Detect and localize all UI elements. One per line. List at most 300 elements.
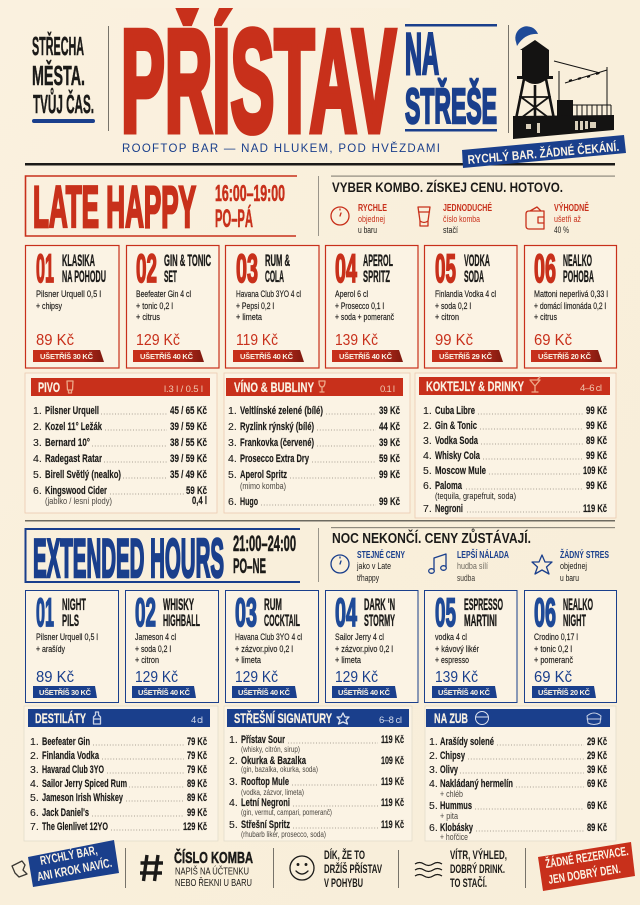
card: 02 Whisky Highball: 02 bbox=[135, 591, 156, 635]
text: wind and view: VÍTR, VÝHLED, bbox=[450, 847, 507, 862]
heading: extended hours: EXTENDED HOURS bbox=[33, 527, 224, 589]
text: same prices bbox=[356, 548, 405, 583]
card: 01 Night Pils bbox=[26, 590, 118, 702]
text: combo number bbox=[174, 848, 253, 889]
list: snacks: + pita bbox=[440, 811, 458, 821]
header: signature: 6–8 cl bbox=[379, 715, 402, 726]
ingredients bbox=[135, 632, 176, 666]
ingredients: Pilsner Urquell 0,5 l bbox=[36, 289, 101, 300]
list: snacks: Klobásky bbox=[440, 822, 474, 834]
list: beer: 4. bbox=[33, 453, 42, 465]
text: no stress: objednej bbox=[560, 561, 587, 571]
ingredients bbox=[235, 632, 302, 666]
combo title: WHISKY bbox=[163, 596, 194, 614]
list: spirits bbox=[30, 736, 207, 833]
text: value: ušetři až bbox=[554, 214, 581, 224]
tagline: ROOFTOP BAR — NAD HLUKEM, POD HVĚZDAMI bbox=[122, 142, 440, 155]
list: cocktails: Moscow Mule bbox=[435, 465, 486, 477]
text: no stress bbox=[560, 548, 609, 583]
ingredients: + citrus bbox=[136, 312, 160, 323]
list: snacks: 69 Kč bbox=[587, 778, 607, 790]
ingredients bbox=[36, 289, 101, 312]
list: spirits: The Glenlivet 12YO bbox=[42, 821, 108, 833]
list: beer: 59 Kč bbox=[186, 485, 207, 497]
price: 99 Kč bbox=[435, 332, 473, 349]
header: spirits: 4 cl bbox=[191, 715, 203, 726]
header: cocktails: KOKTEJLY & DRINKY bbox=[426, 378, 524, 394]
ingredients: + soda 0,2 l bbox=[435, 301, 471, 312]
card: 06 Nealko Pohoba: POHOBA bbox=[563, 268, 594, 286]
savings: UŠETŘÍŠ 40 KČ bbox=[338, 688, 391, 697]
combo title: MARTINI bbox=[464, 612, 497, 630]
list: wine: 44 Kč bbox=[379, 421, 400, 433]
card: 02 Whisky Highball bbox=[126, 590, 218, 702]
list: spirits: 7. bbox=[30, 821, 39, 833]
list: spirits: 79 Kč bbox=[187, 750, 207, 762]
combo title bbox=[363, 252, 393, 286]
savings: UŠETŘÍŠ 40 KČ bbox=[140, 352, 194, 361]
panel: night intro: NOC NEKONČÍ. CENY ZŮSTÁVAJÍ. bbox=[332, 528, 531, 547]
savings: UŠETŘÍŠ 20 KČ bbox=[538, 352, 592, 361]
ingredients: Aperol 6 cl bbox=[335, 289, 368, 300]
list: snacks: Olivy bbox=[440, 764, 459, 776]
list: cocktails: Cuba Libre bbox=[435, 405, 475, 417]
list: beer: Pilsner Urquell bbox=[45, 405, 99, 417]
text: thanks: DRŽÍŠ PŘÍSTAV bbox=[324, 861, 382, 876]
list: beer: 5. bbox=[33, 469, 42, 481]
list: snacks: + chléb bbox=[440, 789, 463, 799]
text: better mood: sudba bbox=[457, 573, 475, 583]
ingredients bbox=[335, 632, 393, 666]
list: wine: 2. bbox=[228, 421, 237, 433]
savings: UŠETŘÍŠ 40 KČ bbox=[438, 688, 491, 697]
card: 03 Rum Cocktail bbox=[226, 590, 318, 702]
ingredients: Pilsner Urquell 0,5 l bbox=[36, 632, 98, 643]
combo title bbox=[164, 252, 211, 286]
text: value: VÝHODNĚ bbox=[554, 201, 589, 214]
text: wind and view bbox=[450, 847, 507, 890]
card: 01 Night Pils: NIGHT bbox=[62, 596, 86, 614]
list: snacks bbox=[429, 736, 607, 842]
text: value: 40 % bbox=[554, 225, 569, 235]
ingredients: vodka 4 cl bbox=[435, 632, 467, 643]
ingredients: + zázvor.pivo 0,2 l bbox=[335, 644, 393, 655]
header: spirits: DESTILÁTY bbox=[35, 710, 86, 726]
list: signature: (gin, vermut, campari, pomeranč) bbox=[241, 808, 332, 817]
list: cocktails: 5. bbox=[423, 465, 432, 477]
ingredients: + domácí limonáda 0,2 l bbox=[534, 301, 606, 312]
list: beer: 3. bbox=[33, 437, 42, 449]
list: wine bbox=[228, 405, 400, 508]
header: beer: l.3 l / 0.5 l bbox=[164, 384, 203, 395]
ingredients: + tonic 0,2 l bbox=[534, 644, 572, 655]
list: cocktails bbox=[423, 405, 607, 515]
text: STŘEŠE bbox=[405, 79, 497, 134]
list: snacks: Hummus bbox=[440, 800, 472, 812]
card: 03 Rum Cocktail: 03 bbox=[235, 591, 257, 635]
list: snacks: 39 Kč bbox=[587, 764, 607, 776]
text: better mood: hudba sílí bbox=[457, 561, 488, 571]
card: 02 Gin & Tonic: GIN & TONIC bbox=[164, 252, 211, 270]
ingredients: Jameson 4 cl bbox=[135, 632, 176, 643]
list: beer: Kingswood Cider bbox=[45, 485, 107, 497]
list: snacks: 3. bbox=[429, 764, 438, 776]
icon: star bbox=[532, 555, 552, 574]
list: cocktails: 4. bbox=[423, 450, 432, 462]
list: wine: 3. bbox=[228, 437, 237, 449]
list: spirits: 5. bbox=[30, 792, 39, 804]
list: wine: 39 Kč bbox=[379, 405, 400, 417]
list: snacks: Nakládaný hermelín bbox=[440, 778, 513, 790]
card: 04 Aperol Spritz: APEROL bbox=[363, 252, 393, 270]
list: snacks: 1. bbox=[429, 736, 438, 748]
ingredients: Havana Club 3YO 4 cl bbox=[236, 289, 301, 300]
text: same prices: jako v Late bbox=[356, 561, 391, 571]
card: 06 Nealko Night: NEALKO bbox=[563, 596, 593, 614]
savings: UŠETŘÍŠ 40 KČ bbox=[339, 352, 393, 361]
text: quick: u baru bbox=[358, 225, 377, 235]
card: 03 Rum & Cola: RUM & bbox=[265, 252, 290, 270]
slogan bbox=[32, 31, 95, 123]
slogan: MĚSTA. bbox=[32, 60, 85, 91]
header: cocktails bbox=[419, 377, 610, 395]
price: 139 Kč bbox=[435, 669, 478, 686]
ingredients bbox=[435, 289, 496, 323]
list: cocktails: 99 Kč bbox=[586, 405, 607, 417]
ingredients bbox=[534, 289, 608, 323]
icon: crumpled note bbox=[12, 861, 27, 877]
list: cocktails: 6. bbox=[423, 480, 432, 492]
text: better mood bbox=[457, 548, 509, 583]
list: cocktails: 7. bbox=[423, 503, 432, 515]
text: simple bbox=[443, 201, 492, 235]
list: cocktails: 119 Kč bbox=[583, 503, 607, 515]
list: wine: Aperol Spritz bbox=[240, 469, 287, 481]
price: 129 Kč bbox=[335, 669, 378, 686]
ingredients bbox=[236, 289, 301, 323]
list: beer: 38 / 55 Kč bbox=[170, 437, 207, 449]
list: wine: (mimo komba) bbox=[240, 481, 286, 491]
list: signature: 119 Kč bbox=[381, 776, 404, 788]
ingredients: + kávový likér bbox=[435, 644, 479, 655]
price: 69 Kč bbox=[534, 669, 572, 686]
list: spirits: Jack Daniel's bbox=[42, 807, 89, 819]
price: 89 Kč bbox=[36, 332, 74, 349]
price: 129 Kč bbox=[235, 669, 278, 686]
title: na střeše bbox=[405, 22, 497, 134]
icon: hash bbox=[140, 855, 163, 881]
ingredients: + Pepsi 0,2 l bbox=[236, 301, 274, 312]
list: wine: Hugo bbox=[240, 496, 258, 508]
list: spirits: 79 Kč bbox=[187, 736, 207, 748]
card: 06 Nealko Night: 06 bbox=[534, 591, 556, 635]
ingredients: + tonic 0,2 l bbox=[136, 301, 173, 312]
ingredients: + citrus bbox=[534, 312, 557, 323]
list: snacks: 6. bbox=[429, 822, 438, 834]
list: wine: Ryzlink rýnský (bílé) bbox=[240, 421, 314, 433]
combo title: NIGHT bbox=[563, 612, 586, 630]
text: simple: číslo komba bbox=[443, 214, 480, 224]
heading: extended hours bbox=[26, 527, 300, 589]
title: na střeše: NA bbox=[405, 22, 439, 87]
text: thanks: DÍK, ŽE TO bbox=[324, 847, 365, 862]
icon: smiley bbox=[290, 856, 314, 880]
list: beer: Birell Světlý (nealko) bbox=[45, 469, 121, 481]
number: 04 bbox=[335, 591, 357, 635]
list: cocktails: Negroni bbox=[435, 503, 463, 515]
panel: night intro bbox=[331, 527, 615, 583]
list: beer: 35 / 49 Kč bbox=[170, 469, 207, 481]
price: 129 Kč bbox=[136, 332, 180, 349]
icon: waves bbox=[415, 862, 442, 878]
list: spirits: Jameson Irish Whiskey bbox=[42, 792, 124, 804]
header: signature: STŘEŠNÍ SIGNATURY bbox=[234, 709, 332, 726]
list: snacks: 5. bbox=[429, 800, 438, 812]
savings: UŠETŘÍŠ 40 KČ bbox=[240, 352, 294, 361]
header: wine bbox=[226, 378, 403, 396]
text: combo number: ČÍSLO KOMBA bbox=[174, 848, 253, 867]
card: 02 Gin & Tonic: 02 bbox=[136, 247, 157, 291]
list: wine: 59 Kč bbox=[379, 453, 400, 465]
text: quick: objednej bbox=[358, 214, 385, 224]
text: no stress: u baru bbox=[560, 573, 579, 583]
list: beer: (jablko / lesní plody) bbox=[45, 496, 112, 506]
slogan: STŘECHA bbox=[32, 31, 84, 61]
badge: fast bar, no extra step bbox=[28, 840, 119, 887]
ingredients: + espresso bbox=[435, 655, 469, 666]
panel: beer bbox=[25, 373, 217, 513]
list: cocktails: 2. bbox=[423, 420, 432, 432]
price: 139 Kč bbox=[335, 332, 378, 349]
list: wine: Veltlínské zelené (bílé) bbox=[240, 405, 323, 417]
ingredients bbox=[335, 289, 394, 323]
ingredients: + limeta bbox=[236, 312, 263, 323]
list: signature: (vodka, zázvor, limeta) bbox=[241, 788, 304, 797]
list: wine: 39 Kč bbox=[379, 437, 400, 449]
header: spirits bbox=[28, 709, 210, 727]
ingredients: + pomeranč bbox=[534, 655, 573, 666]
list: cocktails: 1. bbox=[423, 405, 432, 417]
list: signature: 119 Kč bbox=[381, 819, 404, 831]
ingredients: Sailor Jerry 4 cl bbox=[335, 632, 384, 643]
list: wine: 99 Kč bbox=[379, 496, 400, 508]
list: signature: 119 Kč bbox=[381, 797, 404, 809]
badge: no reservations bbox=[538, 842, 635, 891]
list: wine: Frankovka (červené) bbox=[240, 437, 314, 449]
text: same prices: třhappy bbox=[357, 573, 379, 583]
list: beer: 39 / 59 Kč bbox=[170, 453, 207, 465]
price: 89 Kč bbox=[36, 669, 74, 686]
combo title bbox=[364, 596, 395, 630]
panel: snacks bbox=[425, 706, 616, 842]
list: cocktails: (tequila, grapefruit, soda) bbox=[435, 491, 516, 501]
text: no stress: ŽÁDNÝ STRES bbox=[560, 548, 609, 561]
price: 119 Kč bbox=[236, 332, 278, 349]
ingredients bbox=[435, 632, 479, 666]
savings: UŠETŘÍŠ 40 KČ bbox=[238, 688, 291, 697]
combo title bbox=[563, 596, 593, 630]
ingredients: Havana Club 3YO 4 cl bbox=[235, 632, 302, 643]
header: beer: PIVO bbox=[38, 379, 60, 395]
list: snacks: + hořčice bbox=[440, 832, 468, 842]
list: beer: 1. bbox=[33, 405, 42, 417]
savings: UŠETŘÍŠ 30 KČ bbox=[40, 352, 94, 361]
heading: late happy: PO–PÁ bbox=[215, 204, 253, 233]
list: spirits: 79 Kč bbox=[187, 764, 207, 776]
list: beer: 6. bbox=[33, 485, 42, 497]
illustration: rooftop water tower bbox=[513, 26, 614, 139]
list: signature: 5. bbox=[229, 819, 238, 831]
list: signature: Okurka & Bazalka bbox=[241, 755, 307, 767]
list: spirits: 129 Kč bbox=[183, 821, 207, 833]
list: cocktails: 99 Kč bbox=[586, 480, 607, 492]
list: wine: Prosecco Extra Dry bbox=[240, 453, 310, 465]
list: cocktails: 109 Kč bbox=[583, 465, 607, 477]
icon: wallet bbox=[526, 207, 544, 229]
text: better mood: LEPŠÍ NÁLADA bbox=[457, 548, 509, 561]
list: signature: (gin, bazalka, okurka, soda) bbox=[241, 765, 318, 774]
heading: extended hours: PO–NE bbox=[233, 555, 266, 578]
text: thanks: V POHYBU bbox=[324, 876, 363, 890]
combo title bbox=[62, 252, 106, 286]
card: 02 Whisky Highball: HIGHBALL bbox=[163, 612, 200, 630]
combo title: SPRITZ bbox=[363, 268, 390, 286]
ingredients: Beefeater Gin 4 cl bbox=[136, 289, 191, 300]
list: signature: 4. bbox=[229, 797, 238, 809]
combo title bbox=[464, 596, 503, 630]
list: wine: 6. bbox=[228, 496, 237, 508]
number: 04 bbox=[335, 247, 357, 291]
card: 06 Nealko Pohoba: NEALKO bbox=[563, 252, 592, 270]
text: same prices: STEJNÉ CENY bbox=[357, 548, 405, 561]
header: wine: VÍNO & BUBLINY bbox=[234, 379, 314, 395]
card: 02 Gin & Tonic bbox=[126, 246, 219, 368]
panel: cocktails bbox=[415, 373, 616, 518]
card: 06 Nealko Night bbox=[524, 590, 616, 702]
header: beer bbox=[31, 378, 210, 396]
heading: late happy: LATE HAPPY bbox=[33, 175, 196, 240]
icon: glass bbox=[418, 207, 430, 226]
combo title: SODA bbox=[464, 268, 484, 286]
card: 01 Night Pils: 01 bbox=[36, 591, 54, 635]
savings: UŠETŘÍŠ 30 KČ bbox=[39, 688, 92, 697]
card: 01 Klasika bbox=[26, 246, 119, 368]
ingredients: Mattoni neperlivá 0,33 l bbox=[534, 289, 608, 300]
card: 03 Rum & Cola: 03 bbox=[236, 247, 258, 291]
ingredients: + limeta bbox=[335, 655, 362, 666]
list: signature: 119 Kč bbox=[381, 734, 404, 746]
combo title bbox=[563, 252, 594, 286]
card: 06 Nealko Pohoba bbox=[524, 246, 616, 368]
ingredients: + soda + pomeranč bbox=[335, 312, 394, 323]
combo title: KLASIKA bbox=[62, 252, 95, 270]
list: spirits: 1. bbox=[30, 736, 39, 748]
text: value bbox=[554, 201, 589, 235]
list: spirits: Finlandia Vodka bbox=[42, 750, 100, 762]
list: beer: 45 / 65 Kč bbox=[170, 405, 207, 417]
list: spirits: 89 Kč bbox=[187, 792, 207, 804]
badge: fast bar, no extra step: RYCHLÝ BAR, bbox=[39, 842, 99, 868]
card: 06 Nealko Pohoba: 06 bbox=[534, 247, 556, 291]
ingredients: + citron bbox=[135, 655, 159, 666]
heading: late happy: 16:00–19:00 bbox=[215, 180, 285, 206]
card: 05 Vodka Soda: 05 bbox=[435, 247, 456, 291]
list: snacks: 89 Kč bbox=[587, 822, 607, 834]
list: beer: 0,4 l bbox=[192, 495, 207, 507]
combo title: COLA bbox=[265, 268, 284, 286]
text: simple: JEDNODUCHÉ bbox=[443, 201, 492, 214]
card: 05 Espresso Martini: 05 bbox=[435, 591, 456, 635]
header: cocktails: 4–6 cl bbox=[580, 383, 602, 394]
text: thanks bbox=[324, 847, 382, 890]
card: 01 Klasika: 01 bbox=[36, 247, 54, 291]
list: cocktails: Paloma bbox=[435, 480, 463, 492]
list: cocktails: Gin & Tonic bbox=[435, 420, 477, 432]
list: beer: Radegast Ratar bbox=[45, 453, 103, 465]
text: quick bbox=[358, 203, 387, 235]
list: signature: Rooftop Mule bbox=[241, 776, 289, 788]
list: spirits: Sailor Jerry Spiced Rum bbox=[42, 778, 127, 790]
header: snacks bbox=[426, 709, 610, 727]
card: 05 Espresso Martini bbox=[424, 590, 517, 702]
panel: wine bbox=[224, 373, 410, 513]
list: signature: Střešní Spritz bbox=[241, 819, 290, 831]
combo title bbox=[163, 596, 200, 630]
list: snacks: 2. bbox=[429, 750, 438, 762]
list: beer: Bernard 10° bbox=[45, 437, 90, 449]
ingredients: + citron bbox=[435, 312, 459, 323]
price: 69 Kč bbox=[534, 332, 572, 349]
card: 04 Dark 'n Stormy: STORMY bbox=[364, 612, 395, 630]
text: combo number: NAPIŠ NA ÚČTENKU bbox=[175, 864, 249, 878]
list: snacks: Chipsy bbox=[440, 750, 466, 762]
ingredients bbox=[136, 289, 191, 323]
list: signature: 109 Kč bbox=[381, 755, 404, 767]
list: signature: (rhubarb likér, prosecco, soda) bbox=[241, 830, 326, 839]
list: spirits: 89 Kč bbox=[187, 778, 207, 790]
card: 05 Vodka Soda: VODKA bbox=[464, 252, 490, 270]
text: wind and view: DOBRÝ DRINK. bbox=[450, 861, 505, 876]
text: quick: RYCHLE bbox=[358, 203, 387, 214]
text: wind and view: TO STAČÍ. bbox=[450, 875, 487, 890]
list: signature: 3. bbox=[229, 776, 238, 788]
ingredients: + limeta bbox=[235, 655, 262, 666]
savings: UŠETŘÍŠ 40 KČ bbox=[138, 688, 191, 697]
card: 04 Aperol Spritz bbox=[326, 246, 418, 368]
list: spirits: 2. bbox=[30, 750, 39, 762]
icon: clock bbox=[331, 207, 349, 225]
combo title: RUM bbox=[264, 596, 282, 614]
card: 03 Rum & Cola bbox=[226, 246, 319, 368]
ingredients bbox=[36, 632, 98, 655]
list: spirits: Beefeater Gin bbox=[42, 736, 90, 748]
list: snacks: 4. bbox=[429, 778, 438, 790]
icon: music note bbox=[429, 554, 446, 573]
list: cocktails: 99 Kč bbox=[586, 420, 607, 432]
card: 05 Espresso Martini: ESPRESSO bbox=[464, 596, 503, 614]
card: 05 Vodka Soda bbox=[424, 246, 517, 368]
list: signature: 1. bbox=[229, 734, 238, 746]
header: wine: 0.1 l bbox=[380, 384, 395, 395]
list: cocktails: Whisky Cola bbox=[435, 450, 481, 462]
list: cocktails: 89 Kč bbox=[586, 435, 607, 447]
text: simple: stačí bbox=[443, 225, 458, 235]
list: signature: Letní Negroni bbox=[241, 797, 290, 809]
list: cocktails: 99 Kč bbox=[586, 450, 607, 462]
ingredients: + arašídy bbox=[36, 644, 65, 655]
card: 03 Rum Cocktail: COCKTAIL bbox=[264, 612, 300, 630]
list: spirits: 3. bbox=[30, 764, 39, 776]
